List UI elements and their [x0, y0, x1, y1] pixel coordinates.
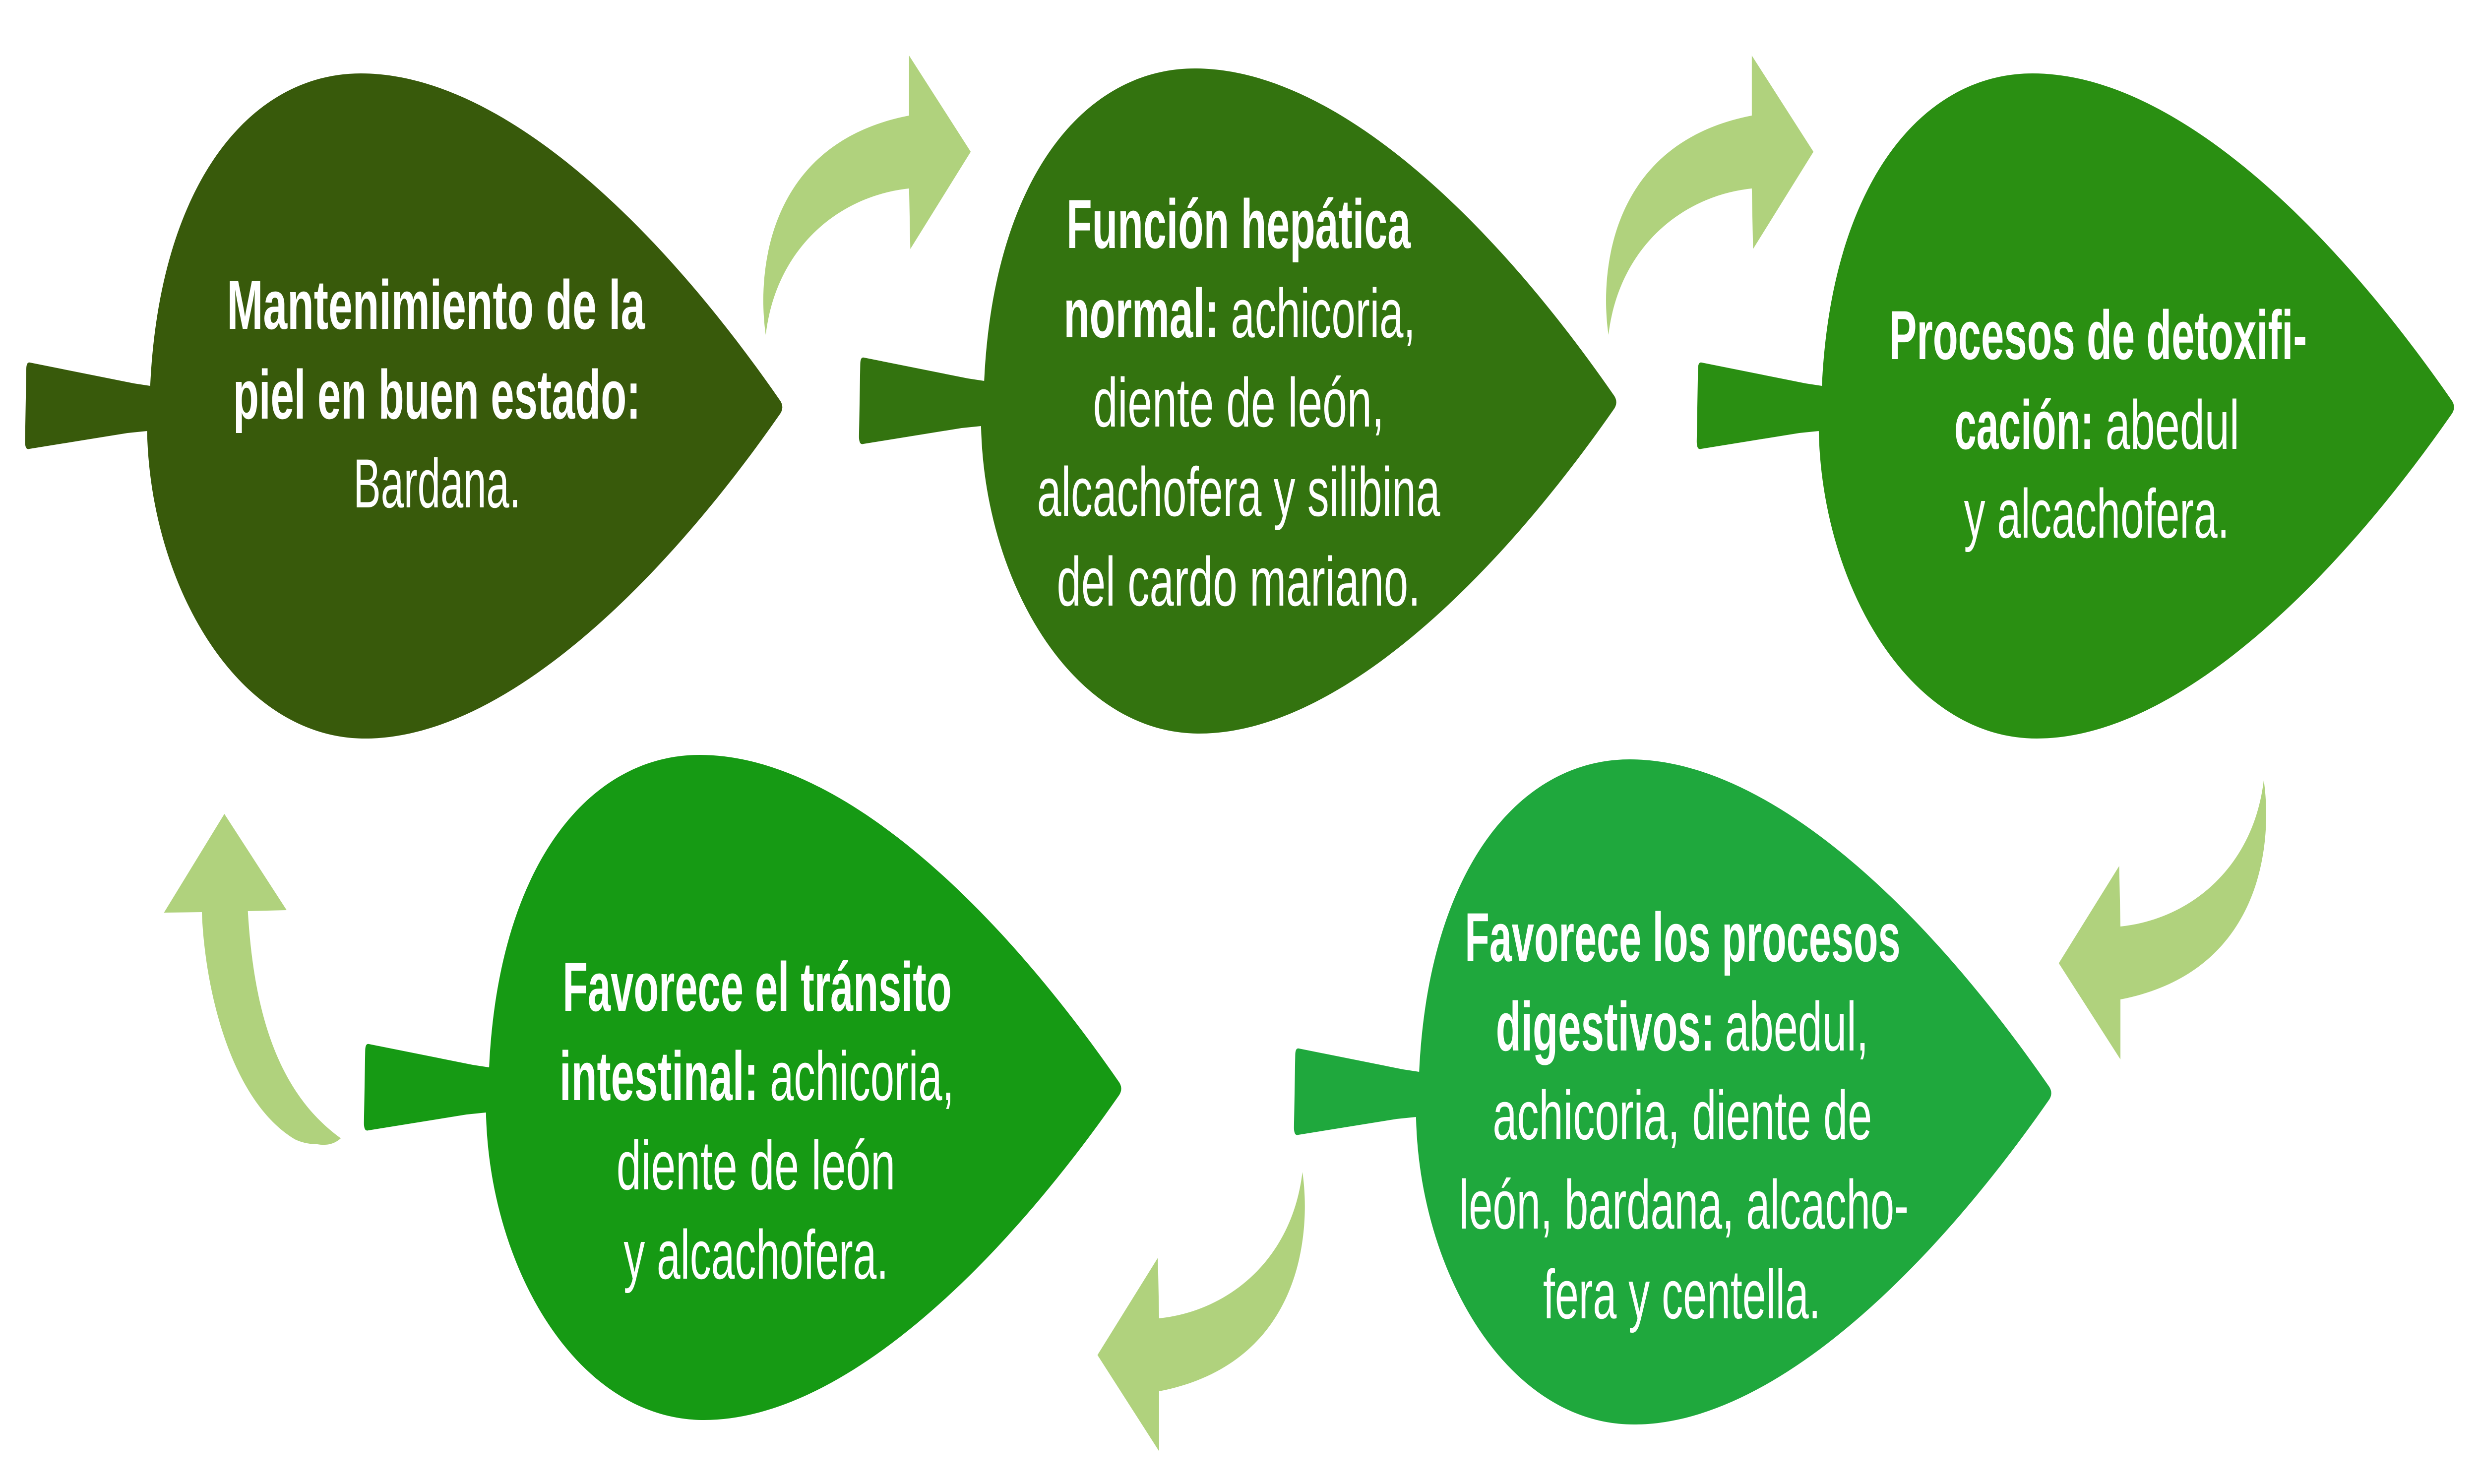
leaf shape 3 — [1697, 73, 2454, 739]
text: detoxification — [1889, 296, 2307, 553]
text: detoxification: cación: — [1954, 386, 2094, 464]
text: detoxification: abedul — [2106, 386, 2239, 464]
text: liver function: Función hepática — [1066, 185, 1411, 263]
text: skin maintenance: Bardana. — [353, 444, 521, 522]
text: liver function: normal: — [1063, 274, 1219, 352]
arrow: leaf 5 to leaf 1 — [164, 814, 341, 1145]
panel: leaf 3, detoxification — [1697, 73, 2454, 739]
leaf shape 5 — [364, 755, 1121, 1420]
text: intestinal transit: y alcachofera. — [623, 1216, 888, 1294]
arrow: leaf 4 to leaf 5 — [1098, 1172, 1305, 1451]
text: liver function: achicoria, — [1231, 274, 1416, 352]
text: liver function: diente de león, — [1093, 364, 1384, 441]
text: intestinal transit: diente de león — [617, 1126, 895, 1204]
text: digestion: abedul, — [1725, 988, 1868, 1065]
text: intestinal transit: achicoria, — [770, 1037, 954, 1115]
text: detoxification: y alcachofera. — [1964, 475, 2230, 553]
leaf shape 1 — [25, 73, 782, 739]
text: intestinal transit: intestinal: — [559, 1037, 758, 1115]
text: liver function: del cardo mariano. — [1057, 543, 1421, 620]
text: skin maintenance — [227, 266, 645, 522]
text: detoxification: Procesos de detoxifi- — [1889, 296, 2307, 374]
panel: leaf 1, skin maintenance — [25, 73, 782, 739]
panel: leaf 5, intestinal transit — [364, 755, 1121, 1420]
leaf shape 2 — [859, 68, 1616, 734]
panel: leaf 4, digestion — [1294, 759, 2051, 1424]
text: digestion: fera y centella. — [1543, 1255, 1821, 1333]
text: liver function: alcachofera y silibina — [1037, 453, 1440, 531]
arrow: leaf 2 to leaf 3 — [1606, 56, 1813, 335]
text: digestion: león, bardana, alcacho- — [1459, 1166, 1909, 1243]
panel: leaf 2, liver function — [859, 68, 1616, 734]
text: intestinal transit: Favorece el tránsito — [562, 948, 952, 1026]
text: intestinal transit — [559, 948, 954, 1294]
text: digestion: achicoria, diente de — [1492, 1076, 1872, 1154]
arrow: leaf 1 to leaf 2 — [763, 56, 971, 335]
text: digestion — [1459, 898, 1909, 1333]
text: skin maintenance: Mantenimiento de la — [227, 266, 645, 344]
text: skin maintenance: piel en buen estado: — [233, 356, 640, 433]
text: digestion: digestivos: — [1496, 988, 1715, 1065]
arrow: leaf 3 to leaf 4 — [2059, 780, 2266, 1059]
leaf shape 4 — [1294, 759, 2051, 1424]
text: digestion: Favorece los procesos — [1465, 898, 1901, 976]
text: liver function — [1037, 185, 1440, 620]
